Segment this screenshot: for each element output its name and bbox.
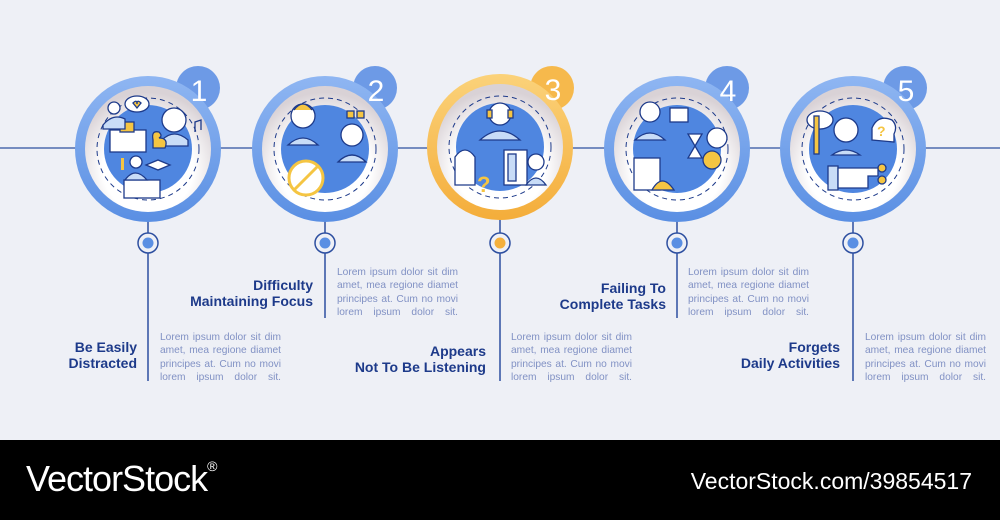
circle 3: 3 — [545, 74, 561, 107]
title 4 — [560, 280, 666, 312]
title 3: Appears — [430, 343, 486, 359]
body 2: lorem ipsum dolor sit. — [337, 307, 458, 318]
body 4: principes at. Cum no movi — [688, 294, 809, 305]
title 1: Distracted — [69, 355, 137, 371]
title 1 — [69, 339, 137, 371]
footer — [0, 440, 1000, 520]
title 2: Difficulty — [253, 277, 313, 293]
body 1: principes at. Cum no movi — [160, 359, 281, 370]
body 3: principes at. Cum no movi — [511, 359, 632, 370]
circle 2 — [252, 66, 398, 222]
circle 5 — [780, 66, 927, 222]
title 4: Failing To — [601, 280, 666, 296]
title 5: Daily Activities — [741, 355, 840, 371]
title 1: Be Easily — [75, 339, 137, 355]
body 5: principes at. Cum no movi — [865, 359, 986, 370]
body 1: lorem ipsum dolor sit. — [160, 372, 281, 383]
body 3: lorem ipsum dolor sit. — [511, 372, 632, 383]
body 1: Lorem ipsum dolor sit dim — [160, 332, 281, 343]
body 2: Lorem ipsum dolor sit dim — [337, 267, 458, 278]
circle 4: 4 — [720, 75, 736, 108]
body 4 — [688, 267, 809, 318]
footer logo: VectorStock® — [26, 458, 216, 499]
body 5: lorem ipsum dolor sit. — [865, 372, 986, 383]
circle 5: 5 — [898, 75, 914, 108]
body 3 — [511, 332, 632, 383]
circle 1 — [75, 66, 221, 222]
body 5 — [865, 332, 986, 383]
body 4: Lorem ipsum dolor sit dim — [688, 267, 809, 278]
body 5: Lorem ipsum dolor sit dim — [865, 332, 986, 343]
circle 5: ? — [877, 123, 886, 139]
title 4: Complete Tasks — [560, 296, 666, 312]
circle 2: 2 — [368, 75, 384, 108]
body 1: amet, mea regione diamet — [160, 345, 281, 356]
title 3 — [355, 343, 486, 375]
body 3: Lorem ipsum dolor sit dim — [511, 332, 632, 343]
body 2: principes at. Cum no movi — [337, 294, 458, 305]
title 2 — [190, 277, 313, 309]
circle 4 — [604, 66, 750, 222]
connector dots — [138, 233, 863, 253]
title 3: Not To Be Listening — [355, 359, 486, 375]
body 1 — [160, 332, 281, 383]
body 5: amet, mea regione diamet — [865, 345, 986, 356]
body 2 — [337, 267, 458, 318]
body 3: amet, mea regione diamet — [511, 345, 632, 356]
body 2: amet, mea regione diamet — [337, 280, 458, 291]
footer url: VectorStock.com/39854517 — [691, 468, 972, 494]
circle 3: ? — [477, 172, 490, 197]
title 2: Maintaining Focus — [190, 293, 313, 309]
body 4: lorem ipsum dolor sit. — [688, 307, 809, 318]
circle 1: 1 — [191, 75, 207, 108]
circle 3 — [427, 66, 574, 220]
title 5: Forgets — [789, 339, 840, 355]
body 4: amet, mea regione diamet — [688, 280, 809, 291]
title 5 — [741, 339, 840, 371]
